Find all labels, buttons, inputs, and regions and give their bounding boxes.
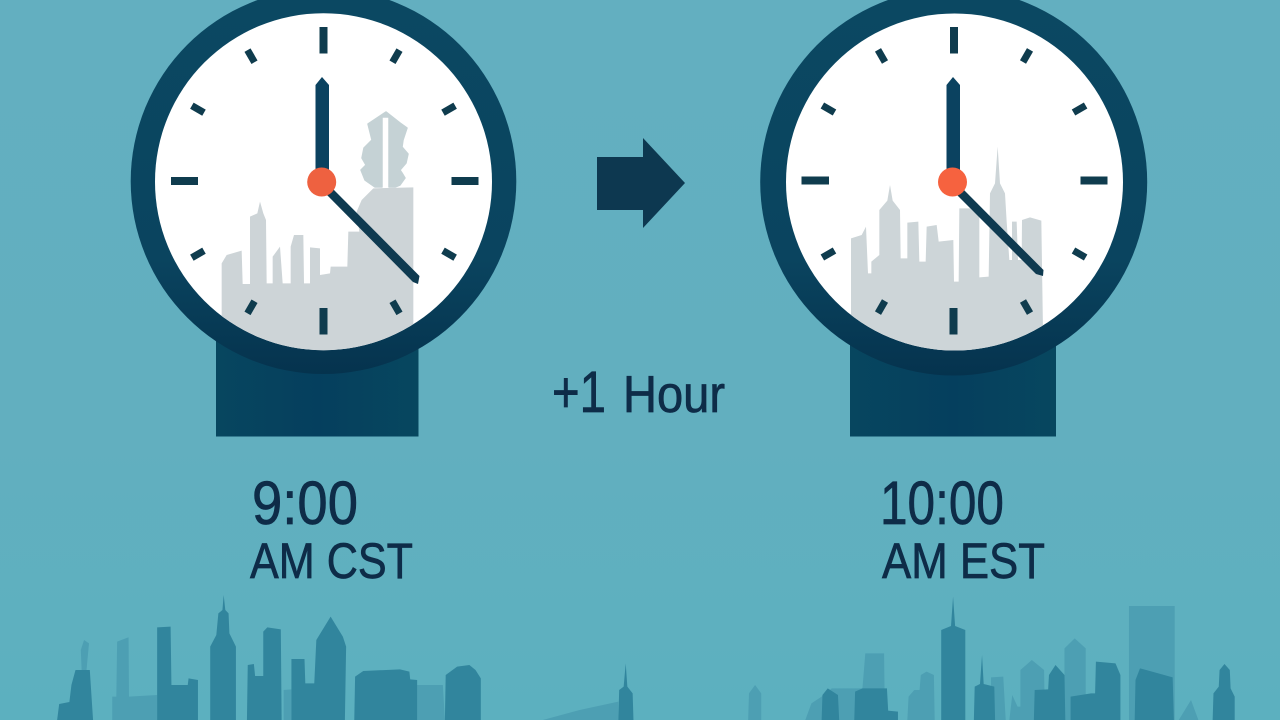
faded background buildings left	[81, 637, 618, 720]
center hub left	[307, 168, 336, 196]
hour hand right	[956, 188, 1044, 276]
minute hand right	[946, 77, 960, 180]
faded city inside right clock	[851, 147, 1043, 353]
left skyline silhouette	[57, 595, 633, 720]
+1 Hour label	[552, 360, 725, 425]
hour hand left	[326, 188, 420, 284]
clock stand right	[850, 340, 1056, 436]
clock ring left	[131, 0, 516, 374]
right clock: 10:00 AM EST	[760, 0, 1147, 436]
plus one: +1	[552, 360, 606, 425]
clock face left	[155, 13, 492, 350]
clock ring right	[760, 0, 1147, 376]
left clock: 9:00 AM CST	[131, 0, 516, 436]
left time label	[250, 469, 413, 589]
time 10:00: 10:00	[880, 469, 1004, 537]
faded city inside left clock	[222, 112, 413, 353]
tower top with slit	[361, 112, 408, 187]
center hub right	[938, 168, 967, 196]
minute hand left	[316, 77, 329, 180]
hour tick marks left	[171, 27, 478, 334]
foreground buildings left	[57, 595, 633, 720]
right time label	[880, 469, 1045, 589]
hour tick marks right	[802, 27, 1108, 334]
foreground buildings right	[822, 597, 1235, 720]
right skyline silhouette	[748, 597, 1235, 720]
zone AM EST: AM EST	[882, 533, 1045, 589]
clock face right	[786, 14, 1123, 350]
hour word: Hour	[623, 366, 725, 424]
faded background buildings right	[748, 606, 1198, 720]
time 9:00: 9:00	[252, 469, 358, 537]
zone AM CST: AM CST	[250, 533, 413, 589]
arrow between clocks	[597, 138, 685, 228]
clock stand left	[216, 340, 418, 436]
